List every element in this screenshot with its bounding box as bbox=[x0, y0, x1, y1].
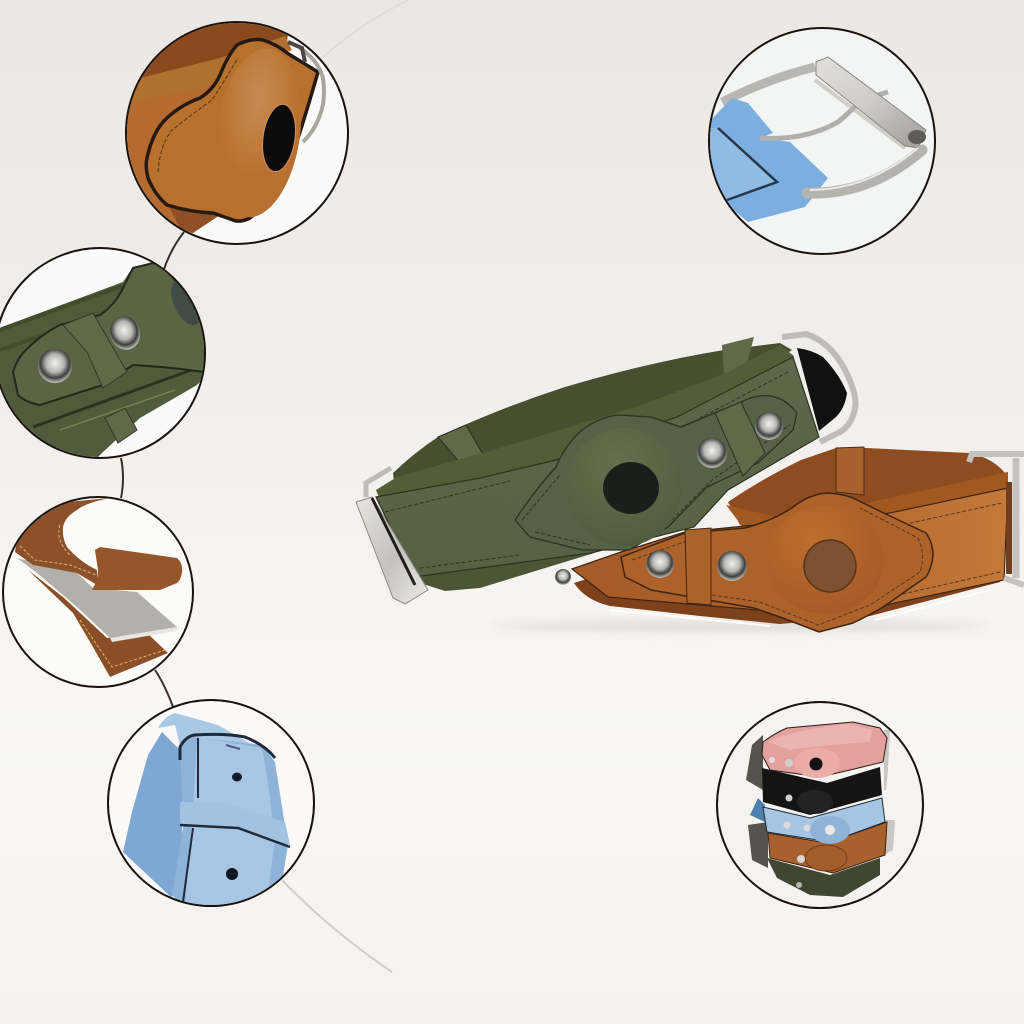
d ring bbox=[782, 334, 856, 442]
small stud behind bbox=[555, 569, 571, 585]
detail circle: stacked collars bbox=[717, 702, 923, 908]
back keeper bbox=[722, 337, 754, 375]
detail circle: green stud strap bbox=[0, 248, 207, 465]
blue webbing bbox=[706, 98, 828, 222]
main strap bbox=[376, 357, 819, 577]
tracker pod bbox=[566, 428, 682, 546]
pod hole bbox=[804, 540, 856, 592]
buckle right bbox=[969, 454, 1024, 585]
detail circle: layered tan strap bbox=[3, 497, 193, 687]
frame top bar bbox=[722, 67, 815, 102]
blue collar bbox=[763, 798, 885, 842]
olive collar bbox=[767, 858, 880, 897]
left hardware bbox=[746, 735, 768, 868]
green collar bbox=[356, 334, 856, 604]
strap end bbox=[1006, 482, 1012, 574]
pod button bbox=[603, 462, 659, 514]
pod holder bbox=[515, 396, 797, 550]
back keeper bbox=[836, 447, 864, 495]
studs bbox=[646, 550, 674, 578]
white edge bbox=[610, 590, 990, 626]
pink collar bbox=[762, 722, 887, 777]
inner fleece bbox=[728, 448, 1008, 525]
frame inner bbox=[815, 80, 905, 148]
detail circle: buckle bbox=[706, 28, 935, 254]
pod holder bbox=[621, 493, 933, 632]
studs bbox=[697, 438, 727, 468]
cylinder bar bbox=[816, 57, 926, 148]
detail circle: brown tag bbox=[120, 15, 348, 244]
keeper bbox=[715, 402, 765, 476]
lower fleece bbox=[574, 570, 1000, 624]
shadow bbox=[490, 621, 990, 631]
brown collar bbox=[490, 447, 1024, 632]
lower fleece bbox=[412, 530, 660, 591]
main strap bbox=[572, 488, 1008, 610]
connector lines bbox=[121, 0, 408, 972]
tracker pod bbox=[766, 506, 884, 614]
keeper bbox=[685, 528, 711, 605]
black collar bbox=[762, 767, 882, 815]
blue leather bbox=[708, 128, 777, 202]
tan collar bbox=[768, 822, 887, 873]
buckle left bbox=[356, 468, 428, 604]
bottom bar bbox=[807, 150, 922, 193]
left keeper bbox=[438, 425, 488, 470]
fleece lip bbox=[376, 345, 794, 505]
pin bbox=[760, 92, 888, 138]
detail circle: blue strap bbox=[108, 700, 314, 915]
inner textile bbox=[393, 343, 792, 490]
ring interior bbox=[797, 348, 847, 431]
fleece lip bbox=[726, 472, 1008, 530]
